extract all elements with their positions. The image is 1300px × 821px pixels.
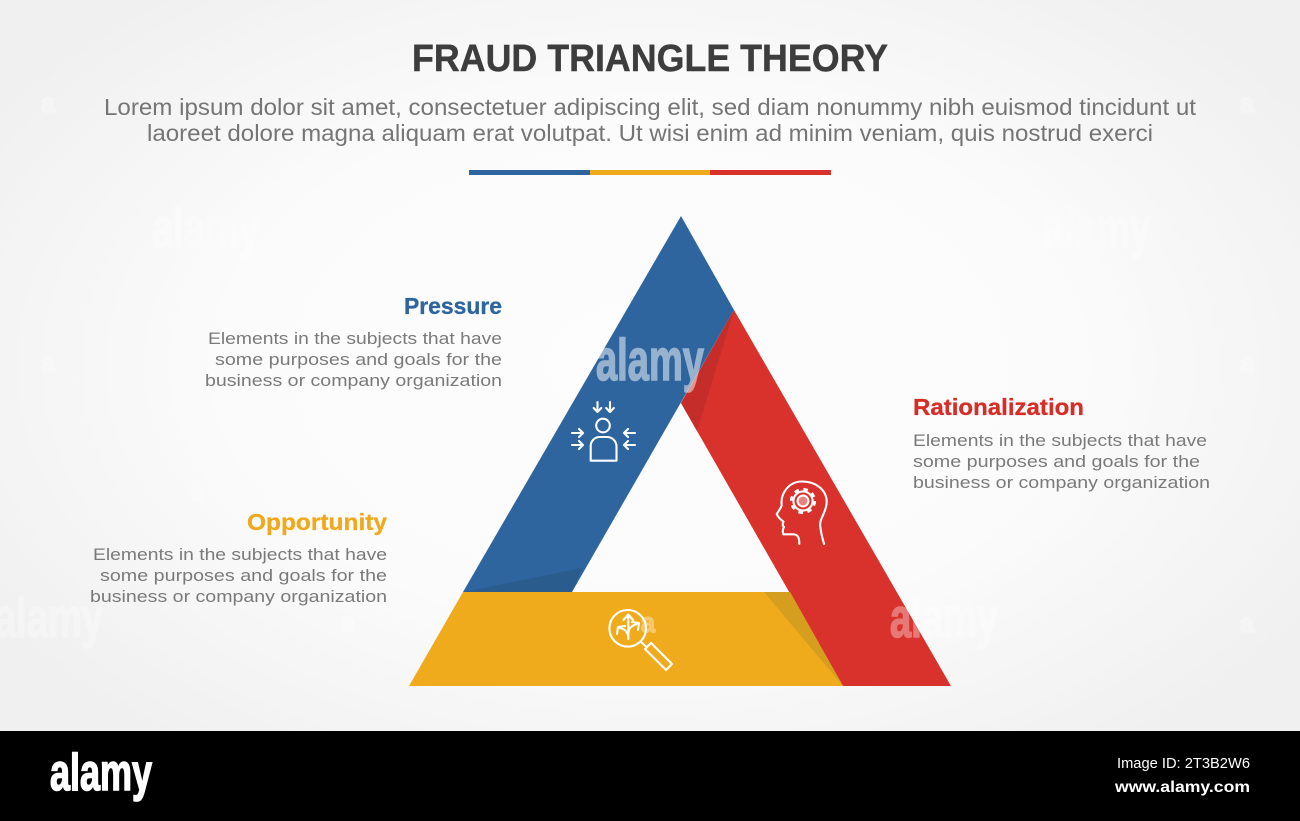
segment: rationalization (red) <box>681 310 951 686</box>
faint watermarks on background: a <box>791 217 805 248</box>
triangle diagram <box>409 216 998 686</box>
centre watermark: alamy <box>596 328 704 393</box>
faint watermarks on background <box>0 87 1254 649</box>
faint watermarks on background: a <box>191 477 205 508</box>
image id: Image ID: 2T3B2W6 <box>1117 755 1250 772</box>
icon: magnifier with diverging arrows <box>609 610 672 670</box>
label: pressure: business or company organization <box>205 371 502 390</box>
label: opportunity: some purposes and goals for the <box>100 566 387 585</box>
label: rationalization: Rationalization <box>913 394 1084 420</box>
label: pressure <box>205 293 502 390</box>
faint watermarks on background: a <box>1240 347 1254 378</box>
faint watermarks on background: a <box>41 87 55 118</box>
label: rationalization: business or company organization <box>913 473 1210 492</box>
faint watermarks on background: a <box>491 217 505 248</box>
label: opportunity: business or company organization <box>90 587 387 606</box>
label: pressure: Pressure <box>404 293 502 319</box>
segment: pressure (blue) <box>463 216 734 592</box>
label: opportunity: Elements in the subjects that have <box>93 545 387 564</box>
large watermark on red: alamy <box>890 586 998 649</box>
subtitle text <box>104 94 1197 146</box>
site address: www.alamy.com <box>1114 779 1250 796</box>
footer bar <box>0 731 1300 821</box>
faint watermarks on background: alamy <box>1043 196 1151 259</box>
faint watermarks on background: alamy <box>152 196 260 259</box>
label: rationalization: Elements in the subjects that have <box>913 431 1207 450</box>
icon: head with gear <box>777 482 827 544</box>
label: opportunity <box>90 509 387 606</box>
faint watermarks on background: a <box>341 607 355 638</box>
subtitle text: laoreet dolore magna aliquam erat volutpat. Ut wisi enim ad minim veniam, quis nostrud exerci <box>147 120 1153 146</box>
footer logo: alamy <box>50 744 152 802</box>
label: pressure: Elements in the subjects that have <box>208 329 502 348</box>
subtitle text: Lorem ipsum dolor sit amet, consectetuer adipiscing elit, sed diam nonummy nibh euismod tincidunt ut <box>104 94 1197 120</box>
tricolor divider <box>469 170 831 175</box>
segment: opportunity (yellow) <box>409 592 843 686</box>
faint watermarks on background: a <box>41 347 55 378</box>
label: pressure: some purposes and goals for the <box>215 350 502 369</box>
label: rationalization: some purposes and goals for the <box>913 452 1200 471</box>
faint watermarks on background: a <box>1240 607 1254 638</box>
faint watermarks on background: a <box>1240 87 1254 118</box>
label: opportunity: Opportunity <box>247 509 387 535</box>
label: rationalization <box>913 394 1210 492</box>
icon: person under pressure <box>572 402 635 461</box>
title: FRAUD TRIANGLE THEORY <box>412 38 888 80</box>
small watermark on yellow: a <box>641 607 655 638</box>
